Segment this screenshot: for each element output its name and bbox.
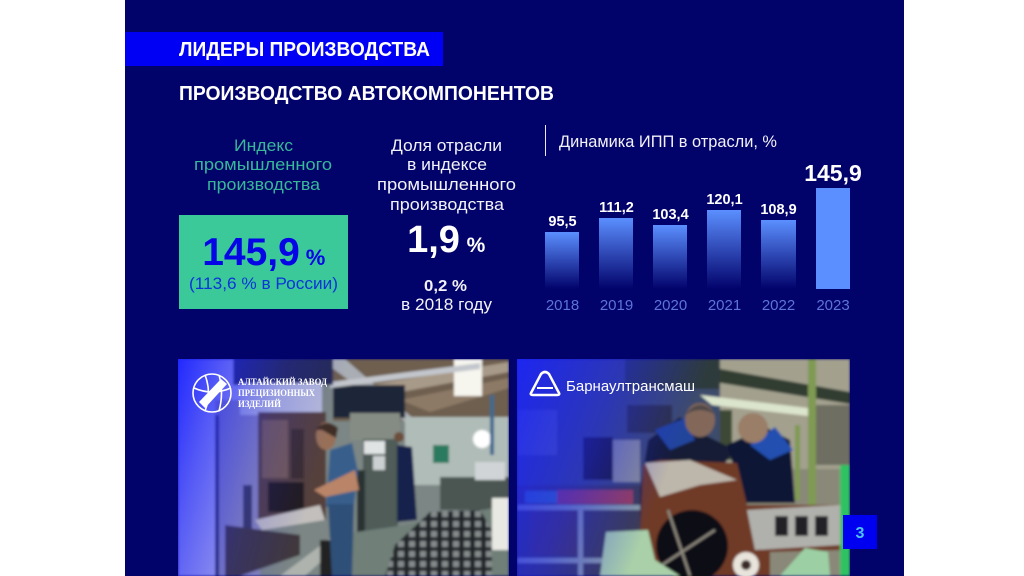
bar values: 111,2 xyxy=(599,200,634,216)
engine xyxy=(640,460,840,576)
left machinery xyxy=(517,359,720,489)
heading: share xyxy=(377,136,516,214)
bar values xyxy=(548,160,862,230)
floor xyxy=(350,505,509,576)
machine opening xyxy=(258,412,326,520)
bar values: 108,9 xyxy=(760,202,797,218)
workbench xyxy=(225,525,300,576)
table and equipment xyxy=(440,477,509,510)
second worker xyxy=(394,432,417,522)
bar values: 145,9 xyxy=(804,160,862,186)
worker right xyxy=(727,413,795,503)
logo: Altai precision plant: ИЗДЕЛИЙ xyxy=(238,398,282,410)
title: ПРОИЗВОДСТВО АВТОКОМПОНЕНТОВ xyxy=(179,83,554,105)
year axis: 2018 xyxy=(546,297,579,314)
value card xyxy=(179,215,348,309)
comparison with 2018: 0,2 % xyxy=(424,278,467,295)
heading: index: Индекс xyxy=(234,136,294,155)
bar values: 103,4 xyxy=(652,207,689,223)
panel: index dynamics chart xyxy=(545,125,862,314)
value card: % xyxy=(306,245,325,270)
logo: Barnaultransmash: Барнаултрансмаш xyxy=(566,379,695,395)
heading: index xyxy=(194,136,332,194)
heading: share: производства xyxy=(390,195,505,214)
page number: 3 xyxy=(856,525,865,542)
photo: precision parts plant xyxy=(178,359,509,576)
logo: Altai precision plant xyxy=(193,374,327,412)
year axis: 2019 xyxy=(600,297,633,314)
heading: share: Доля отрасли xyxy=(391,136,502,155)
section header banner xyxy=(125,32,443,66)
chart heading: Динамика ИПП в отрасли, % xyxy=(559,133,777,151)
logo: Altai precision plant: АЛТАЙСКИЙ ЗАВОД xyxy=(238,376,327,388)
blue overlay xyxy=(517,359,703,576)
green columns xyxy=(808,359,816,509)
logo: Altai precision plant: ПРЕЦИЗИОННЫХ xyxy=(238,389,315,399)
page number xyxy=(843,515,877,549)
heading: share: в индексе xyxy=(407,155,487,174)
year axis: 2022 xyxy=(762,297,795,314)
worker left xyxy=(638,402,732,512)
blue overlay xyxy=(178,359,332,576)
year axis: 2023 xyxy=(816,297,850,314)
panel: industry share xyxy=(377,136,516,314)
value card: 145,9 xyxy=(202,231,300,274)
value: share xyxy=(407,219,486,261)
section header banner: ЛИДЕРЫ ПРОИЗВОДСТВА xyxy=(179,39,430,61)
panel: industrial production index xyxy=(179,136,348,309)
machine body xyxy=(178,359,241,576)
bar values: 95,5 xyxy=(548,214,577,230)
value: share: 1,9 xyxy=(407,219,460,261)
value card: (113,6 % в России) xyxy=(189,274,338,293)
rack of parts xyxy=(385,510,492,576)
comparison with 2018 xyxy=(401,278,493,314)
year axis xyxy=(546,297,850,314)
bar chart xyxy=(545,188,850,289)
logo: Barnaultransmash xyxy=(531,372,695,395)
cabinet xyxy=(363,439,398,533)
back wall xyxy=(405,417,509,485)
slide background xyxy=(125,0,904,576)
photo: Barnaultransmash plant xyxy=(517,359,850,576)
value: share: % xyxy=(467,234,486,257)
comparison with 2018: в 2018 году xyxy=(401,295,493,314)
bar values: 120,1 xyxy=(706,192,743,208)
shelves xyxy=(517,485,642,576)
ceiling xyxy=(333,359,509,421)
year axis: 2021 xyxy=(708,297,741,314)
wall xyxy=(720,359,850,469)
heading: index: производства xyxy=(207,175,321,194)
paper sign xyxy=(492,498,509,550)
year axis: 2020 xyxy=(654,297,687,314)
heading: index: промышленного xyxy=(194,155,332,174)
gearbox xyxy=(600,530,680,576)
heading: share: промышленного xyxy=(377,175,516,194)
green strip xyxy=(840,465,850,576)
main worker xyxy=(314,422,359,576)
lamp xyxy=(700,395,808,416)
